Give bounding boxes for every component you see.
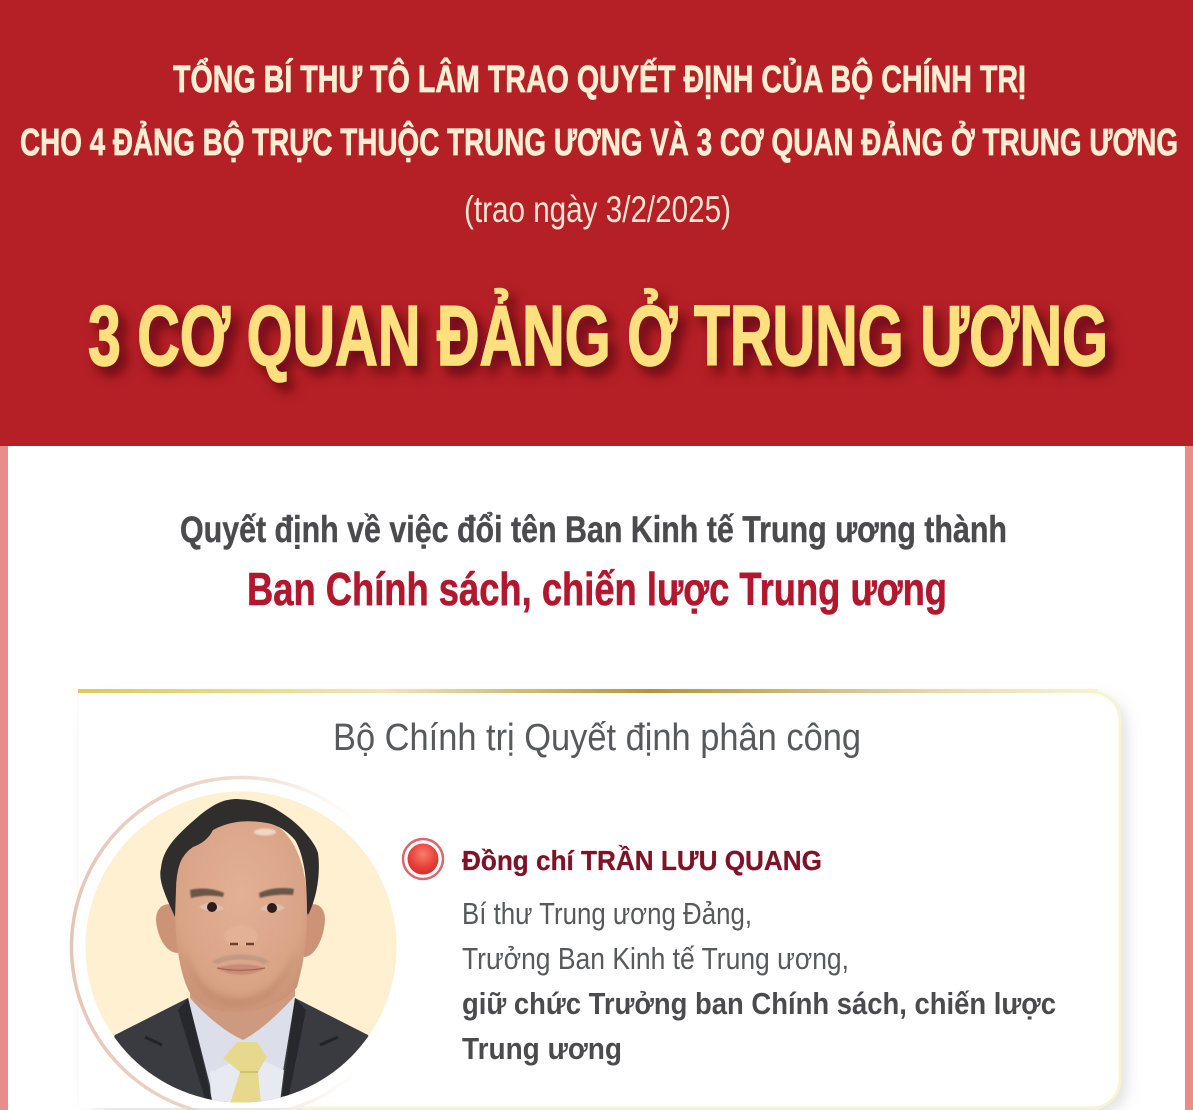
lapel shadows: [178, 998, 212, 1102]
shirt: [188, 998, 295, 1110]
portrait: [72, 778, 410, 1110]
person name: Đồng chí TRẦN LƯU QUANG: [462, 845, 822, 876]
mouth: [217, 964, 265, 975]
suit: [114, 998, 368, 1102]
decision highlight: Ban Chính sách, chiến lược Trung ương: [247, 563, 947, 615]
date subtitle: (trao ngày 3/2/2025): [464, 189, 731, 230]
right side strip: [1185, 446, 1193, 1110]
moustache shade: [212, 954, 270, 964]
eyes: [199, 903, 224, 911]
left side strip: [0, 446, 8, 1110]
new role line 1: giữ chức Trưởng ban Chính sách, chiến lược: [462, 986, 1056, 1021]
hair: [160, 799, 319, 917]
eyebrows: [190, 889, 224, 898]
neck: [190, 990, 295, 1040]
new role line 2: Trung ương: [462, 1031, 622, 1066]
role line 1: Bí thư Trung ương Đảng,: [462, 896, 752, 931]
tie: [223, 1042, 267, 1104]
nose: [225, 928, 257, 946]
cheek shading: [194, 974, 284, 1006]
panel: assignment card: [72, 689, 1120, 1110]
face: [174, 815, 307, 1012]
panel: red header: [0, 0, 1193, 446]
card heading: Bộ Chính trị Quyết định phân công: [333, 717, 861, 759]
icon: red bullet: [403, 839, 443, 879]
forehead highlight: [254, 828, 276, 836]
ears: [156, 904, 178, 953]
role line 2: Trưởng Ban Kinh tế Trung ương,: [462, 941, 849, 976]
decision line: Quyết định về việc đổi tên Ban Kinh tế Trung ương thành: [180, 509, 1007, 550]
